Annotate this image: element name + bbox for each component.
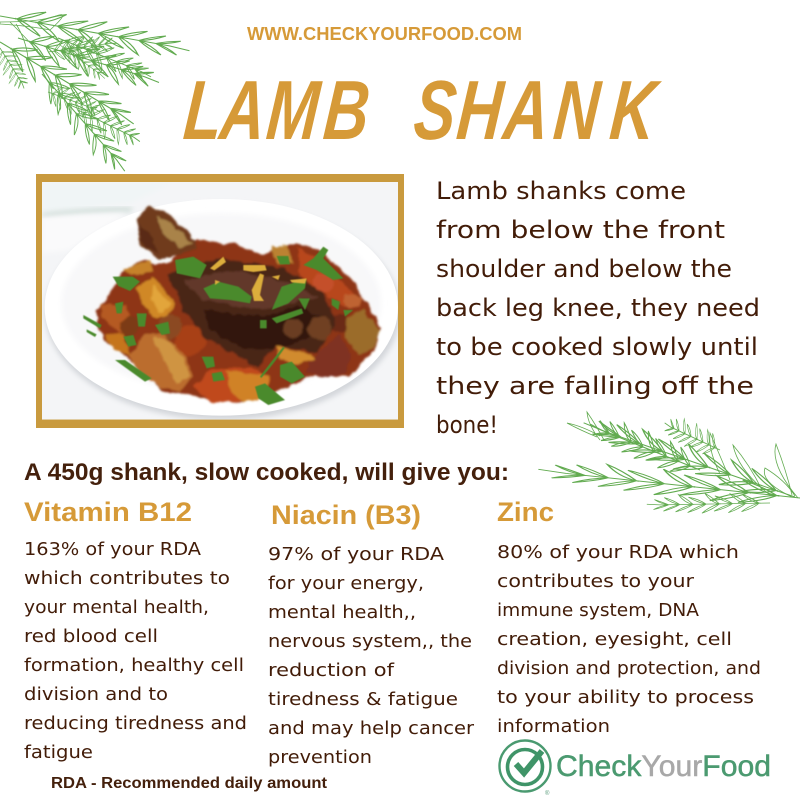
panel: vitamin B12: division and to — [24, 684, 168, 705]
stew — [97, 240, 380, 403]
intro paragraph: from below the front — [436, 216, 725, 244]
logo: CheckYourFood: ® — [545, 790, 550, 797]
footnote: RDA - Recommended daily amount — [51, 775, 328, 792]
website url: WWW.CHECKYOURFOOD.COM — [247, 24, 522, 44]
logo: CheckYourFood: CheckYourFood — [556, 750, 771, 783]
panel: zinc: Zinc — [497, 497, 554, 527]
panel: vitamin B12: red blood cell — [24, 626, 158, 647]
heading: what a shank gives: A 450g shank, slow cooked, will give you: — [24, 459, 509, 486]
panel: vitamin B12: reducing tiredness and — [24, 713, 247, 734]
photo: lamb shank on white plate — [36, 174, 404, 428]
intro paragraph: shoulder and below the — [436, 255, 732, 283]
panel: vitamin B12: which contributes to — [24, 568, 230, 589]
panel: zinc: to your ability to process — [497, 687, 754, 708]
intro paragraph: they are falling off the — [436, 372, 754, 400]
panel: niacin B3: nervous system,, the — [268, 631, 472, 652]
panel: vitamin B12: your mental health, — [24, 597, 209, 618]
panel: vitamin B12: formation, healthy cell — [24, 655, 244, 676]
panel: zinc: creation, eyesight, cell — [497, 629, 732, 650]
panel: vitamin B12: Vitamin B12 — [24, 497, 192, 527]
intro paragraph — [436, 177, 760, 439]
panel: vitamin B12 — [24, 497, 247, 763]
meat — [168, 258, 337, 367]
intro paragraph: Lamb shanks come — [436, 177, 686, 205]
lemon zest — [210, 257, 307, 301]
panel: niacin B3: Niacin (B3) — [271, 500, 421, 530]
panel: niacin B3: and may help cancer — [268, 718, 475, 739]
title: LAMB SHANK — [180, 63, 664, 157]
logo: CheckYourFood — [500, 740, 771, 797]
panel: niacin B3: tiredness & fatigue — [268, 689, 458, 710]
intro paragraph: back leg knee, they need — [436, 294, 760, 322]
panel: niacin B3: for your energy, — [268, 573, 424, 594]
panel: niacin B3: reduction of — [268, 660, 395, 681]
panel: zinc — [497, 497, 761, 737]
intro paragraph: bone! — [436, 411, 498, 439]
panel: zinc: division and protection, and — [497, 658, 761, 679]
icon: rosemary branch right — [537, 409, 800, 514]
panel: zinc: immune system, DNA — [497, 600, 700, 621]
panel: vitamin B12: fatigue — [24, 742, 93, 763]
panel: zinc: 80% of your RDA which — [497, 542, 739, 563]
panel: niacin B3 — [268, 500, 475, 768]
panel: vitamin B12: 163% of your RDA — [24, 539, 202, 560]
panel: zinc: information — [497, 716, 610, 737]
potatoes — [130, 333, 193, 392]
panel: niacin B3: prevention — [268, 747, 372, 768]
bone — [135, 206, 197, 259]
panel: niacin B3: 97% of your RDA — [268, 544, 445, 565]
panel: niacin B3: mental health,, — [268, 602, 416, 623]
icon: rosemary branch top left — [0, 3, 192, 181]
intro paragraph: to be cooked slowly until — [436, 333, 758, 361]
panel: zinc: contributes to your — [497, 571, 695, 592]
herbs — [83, 247, 353, 405]
